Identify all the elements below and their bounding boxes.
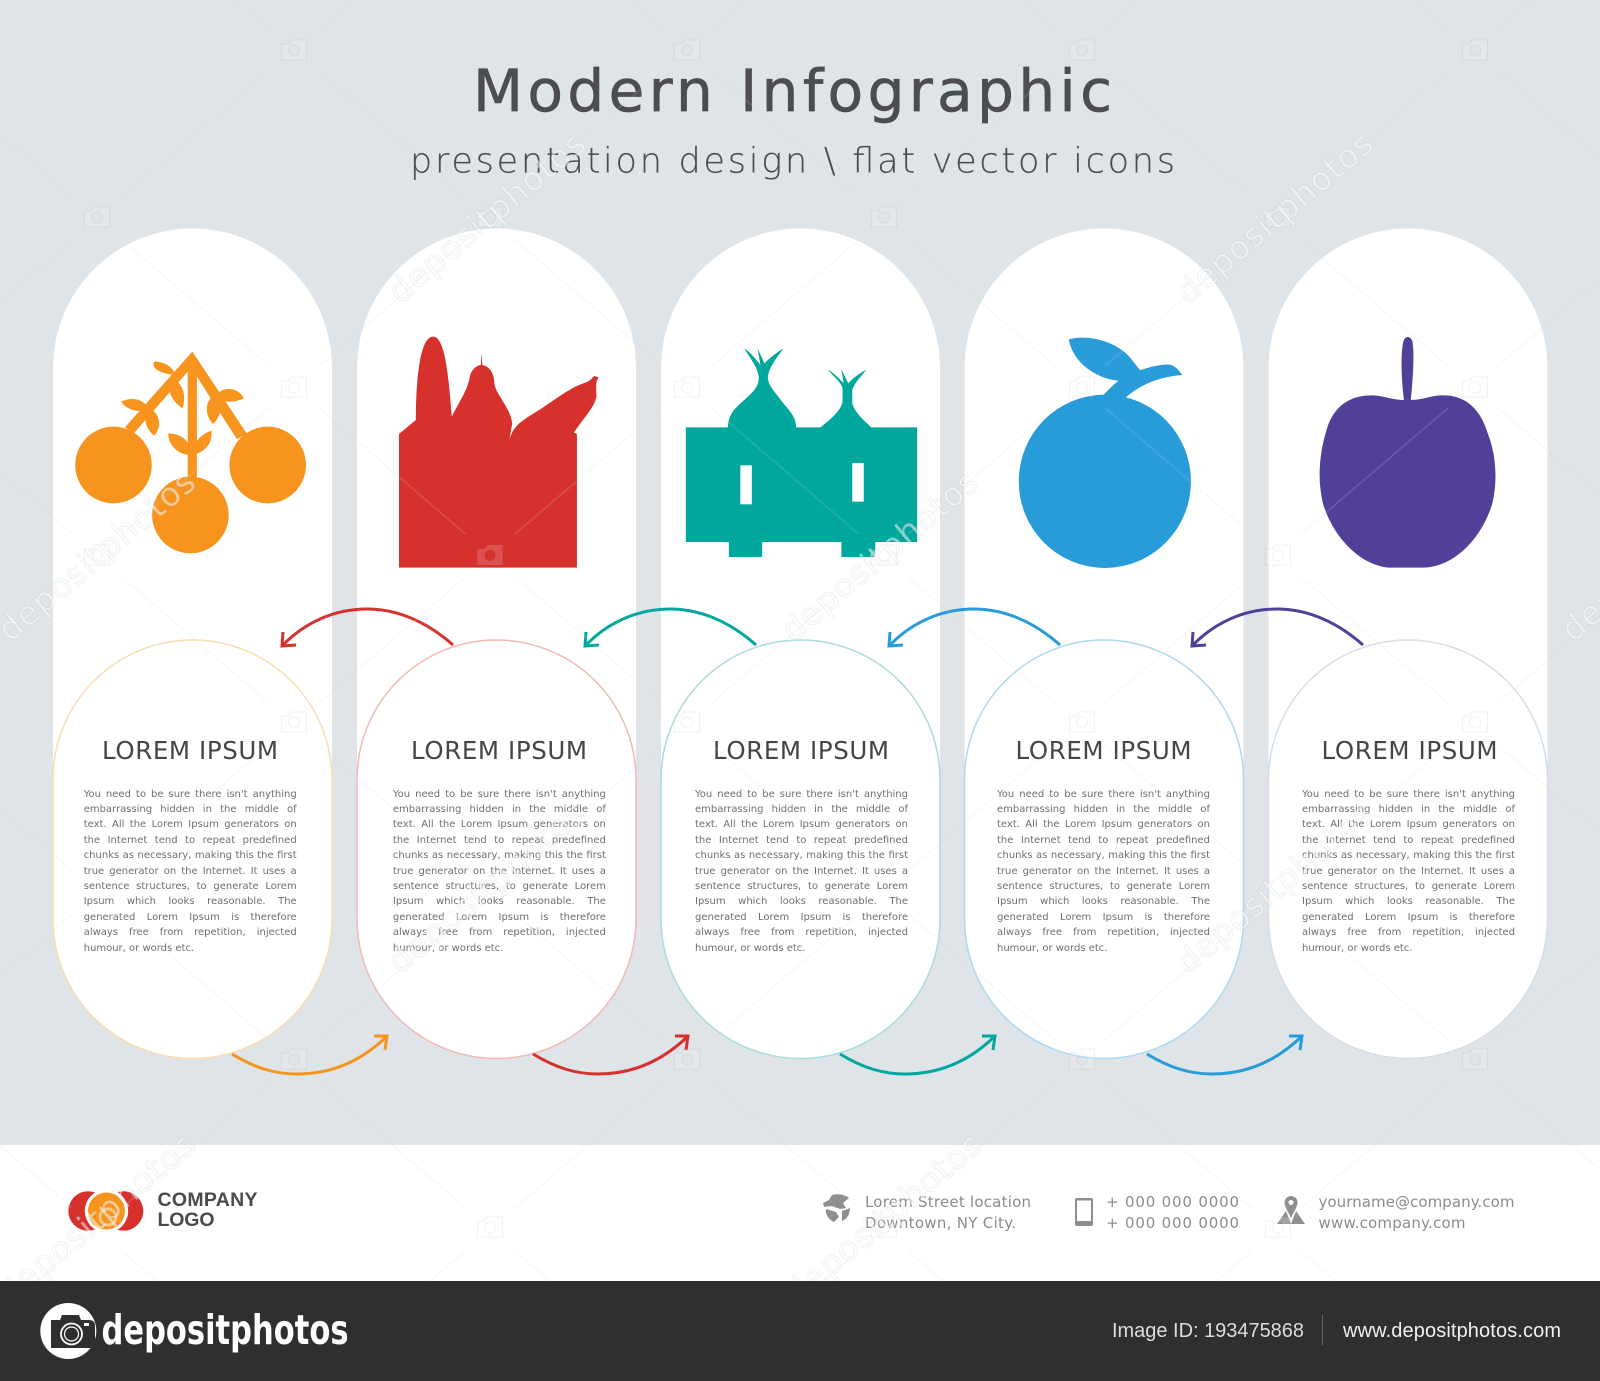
text block: column 3: You need to be sure there isn't anything <box>695 788 908 800</box>
watermark: stock photo marks: depositphotos <box>1168 794 1381 981</box>
text block: column 1: embarrassing hidden in the middle of <box>84 804 297 815</box>
text block: column 1: sentence structures, to generate Lorem <box>84 881 297 892</box>
panel: column 3 text oval <box>661 640 940 1058</box>
text block: column 3: text. All the Lorem Ipsum generators on <box>695 819 908 830</box>
arrow: red bottom <box>533 1036 688 1074</box>
text block: column 4: chunks as necessary, making this the first <box>997 850 1210 861</box>
text block: column 1: Ipsum which looks reasonable. The <box>84 896 297 907</box>
icon: plum <box>1320 337 1495 568</box>
image id: Image ID: 193475868 <box>1112 1320 1304 1342</box>
panel: column 5 background <box>1268 228 1548 900</box>
contact: email and web: www.company.com <box>1318 1214 1466 1232</box>
text block: column 4 <box>997 788 1210 954</box>
text block: column 1: humour, or words etc. <box>84 943 194 954</box>
text block: column 5: embarrassing hidden in the middle of <box>1302 804 1515 815</box>
arrow: blue top <box>889 609 1060 646</box>
text block: column 5: sentence structures, to generate Lorem <box>1302 881 1515 892</box>
watermark: stock photo marks: depositphotos <box>1168 124 1381 311</box>
company name: LOGO <box>158 1209 214 1231</box>
text block: column 3: humour, or words etc. <box>695 943 805 954</box>
text block: column 1: the Internet tend to repeat predefined <box>84 835 297 846</box>
text block: column 1: You need to be sure there isn't anything <box>84 788 297 800</box>
website: www.depositphotos.com <box>1342 1320 1561 1342</box>
text block: column 2: text. All the Lorem Ipsum generators on <box>393 819 606 830</box>
text block: column 5: Ipsum which looks reasonable. The <box>1302 896 1515 907</box>
text block: column 3: Ipsum which looks reasonable. The <box>695 896 908 907</box>
text block: column 1 <box>84 788 297 954</box>
heading: column 2: LOREM IPSUM <box>411 736 587 765</box>
arrow: teal bottom <box>840 1036 995 1074</box>
arrow: orange bottom <box>232 1036 387 1074</box>
text block: column 4: generated Lorem Ipsum is therefore <box>997 912 1210 923</box>
panel: column 3 background <box>661 228 940 900</box>
icon: cherries <box>75 352 306 553</box>
text block: column 3 <box>695 788 908 954</box>
contact: phone numbers <box>1106 1193 1239 1232</box>
text block: column 2: humour, or words etc. <box>393 943 503 954</box>
contact: address: Lorem Street location <box>865 1193 1031 1211</box>
text block: column 3: sentence structures, to generate Lorem <box>695 881 908 892</box>
text block: column 3: the Internet tend to repeat predefined <box>695 835 908 846</box>
icon: onions in crate <box>686 348 917 557</box>
text block: column 5: true generator on the Internet. It uses a <box>1302 866 1515 877</box>
heading: column 3: LOREM IPSUM <box>713 736 889 765</box>
text block: column 3: chunks as necessary, making this the first <box>695 850 908 861</box>
text block: column 1: generated Lorem Ipsum is therefore <box>84 912 297 923</box>
contact: phone numbers: + 000 000 0000 <box>1106 1193 1239 1211</box>
text block: column 5: generated Lorem Ipsum is therefore <box>1302 912 1515 923</box>
contact: email and web: yourname@company.com <box>1318 1193 1514 1211</box>
arrow: blue bottom <box>1147 1036 1302 1074</box>
text block: column 2 <box>393 788 606 954</box>
company name: COMPANY <box>158 1189 258 1211</box>
text block: column 1: chunks as necessary, making this the first <box>84 850 297 861</box>
watermark: stock photo marks: depositphotos <box>380 794 593 981</box>
icon: fruit and vegetable box <box>399 337 599 568</box>
subtitle: presentation design \ flat vector icons <box>410 142 1175 182</box>
panel: column 5 text oval <box>1268 640 1548 1058</box>
panel: column 2 background <box>357 228 636 900</box>
contact: address <box>865 1193 1031 1232</box>
text block: column 1: always free from repetition, injected <box>84 927 297 938</box>
text block: column 5: humour, or words etc. <box>1302 943 1412 954</box>
text block: column 5: the Internet tend to repeat predefined <box>1302 835 1515 846</box>
text block: column 5: You need to be sure there isn't anything <box>1302 788 1515 800</box>
text block: column 4: sentence structures, to generate Lorem <box>997 881 1210 892</box>
text block: column 2: You need to be sure there isn't anything <box>393 788 606 800</box>
watermark: stock photo marks: depositphotos <box>773 462 986 649</box>
text block: column 2: true generator on the Internet. It uses a <box>393 866 606 877</box>
brand name: depositphotos <box>102 1306 348 1354</box>
icon: orange with leaf <box>1019 338 1191 568</box>
title: Modern Infographic <box>473 57 1112 125</box>
company name <box>158 1189 258 1231</box>
panel: column 4 text oval <box>964 640 1244 1058</box>
heading: column 1: LOREM IPSUM <box>102 736 278 765</box>
text block: column 1: true generator on the Internet. It uses a <box>84 866 297 877</box>
text block: column 1: text. All the Lorem Ipsum generators on <box>84 819 297 830</box>
icon: map pin <box>1277 1196 1305 1224</box>
text block: column 2: Ipsum which looks reasonable. The <box>393 896 606 907</box>
icon: depositphotos logo <box>40 1303 96 1359</box>
text block: column 3: always free from repetition, injected <box>695 927 908 938</box>
text block: column 2: chunks as necessary, making this the first <box>393 850 606 861</box>
panel: column 4 background <box>964 228 1244 900</box>
watermark: stock photo marks: depositphotos <box>380 124 593 311</box>
text block: column 5: text. All the Lorem Ipsum generators on <box>1302 819 1515 830</box>
text block: column 4: humour, or words etc. <box>997 943 1107 954</box>
text block: column 3: true generator on the Internet. It uses a <box>695 866 908 877</box>
text block: column 2: embarrassing hidden in the middle of <box>393 804 606 815</box>
text block: column 4: text. All the Lorem Ipsum generators on <box>997 819 1210 830</box>
contact: address: Downtown, NY City. <box>865 1214 1016 1232</box>
panel: column 2 text oval <box>357 640 636 1058</box>
icon: phone <box>1075 1198 1093 1226</box>
arrow: red top <box>282 609 453 646</box>
text block: column 5: always free from repetition, injected <box>1302 927 1515 938</box>
watermark: camera marks <box>84 40 1488 1237</box>
text block: column 2: always free from repetition, injected <box>393 927 606 938</box>
panel: column 1 text oval <box>53 640 332 1058</box>
panel: column 1 background <box>53 228 332 900</box>
text block: column 4: embarrassing hidden in the middle of <box>997 804 1210 815</box>
heading: column 5: LOREM IPSUM <box>1322 736 1498 765</box>
text block: column 3: generated Lorem Ipsum is therefore <box>695 912 908 923</box>
text block: column 5 <box>1302 788 1516 954</box>
contact: email and web <box>1318 1193 1514 1232</box>
arrow: teal top <box>585 609 756 646</box>
contact: phone numbers: + 000 000 0000 <box>1106 1214 1239 1232</box>
text block: column 5: chunks as necessary, making this the first <box>1302 850 1515 861</box>
panel: footer band <box>0 1145 1600 1281</box>
icon: company logo <box>68 1189 143 1233</box>
text block: column 4: You need to be sure there isn't anything <box>997 788 1210 800</box>
text block: column 3: embarrassing hidden in the middle of <box>695 804 908 815</box>
text block: column 2: generated Lorem Ipsum is therefore <box>393 912 606 923</box>
text block: column 2: sentence structures, to generate Lorem <box>393 881 606 892</box>
text block: column 4: true generator on the Internet. It uses a <box>997 866 1210 877</box>
panel: dark brand bar <box>0 1281 1600 1381</box>
text block: column 4: always free from repetition, injected <box>997 927 1210 938</box>
text block: column 4: Ipsum which looks reasonable. The <box>997 896 1210 907</box>
divider <box>1322 1315 1323 1345</box>
arrow: purple top <box>1192 609 1363 646</box>
heading: column 4: LOREM IPSUM <box>1016 736 1192 765</box>
text block: column 4: the Internet tend to repeat predefined <box>997 835 1210 846</box>
text block: column 2: the Internet tend to repeat predefined <box>393 835 606 846</box>
icon: globe <box>823 1194 850 1222</box>
